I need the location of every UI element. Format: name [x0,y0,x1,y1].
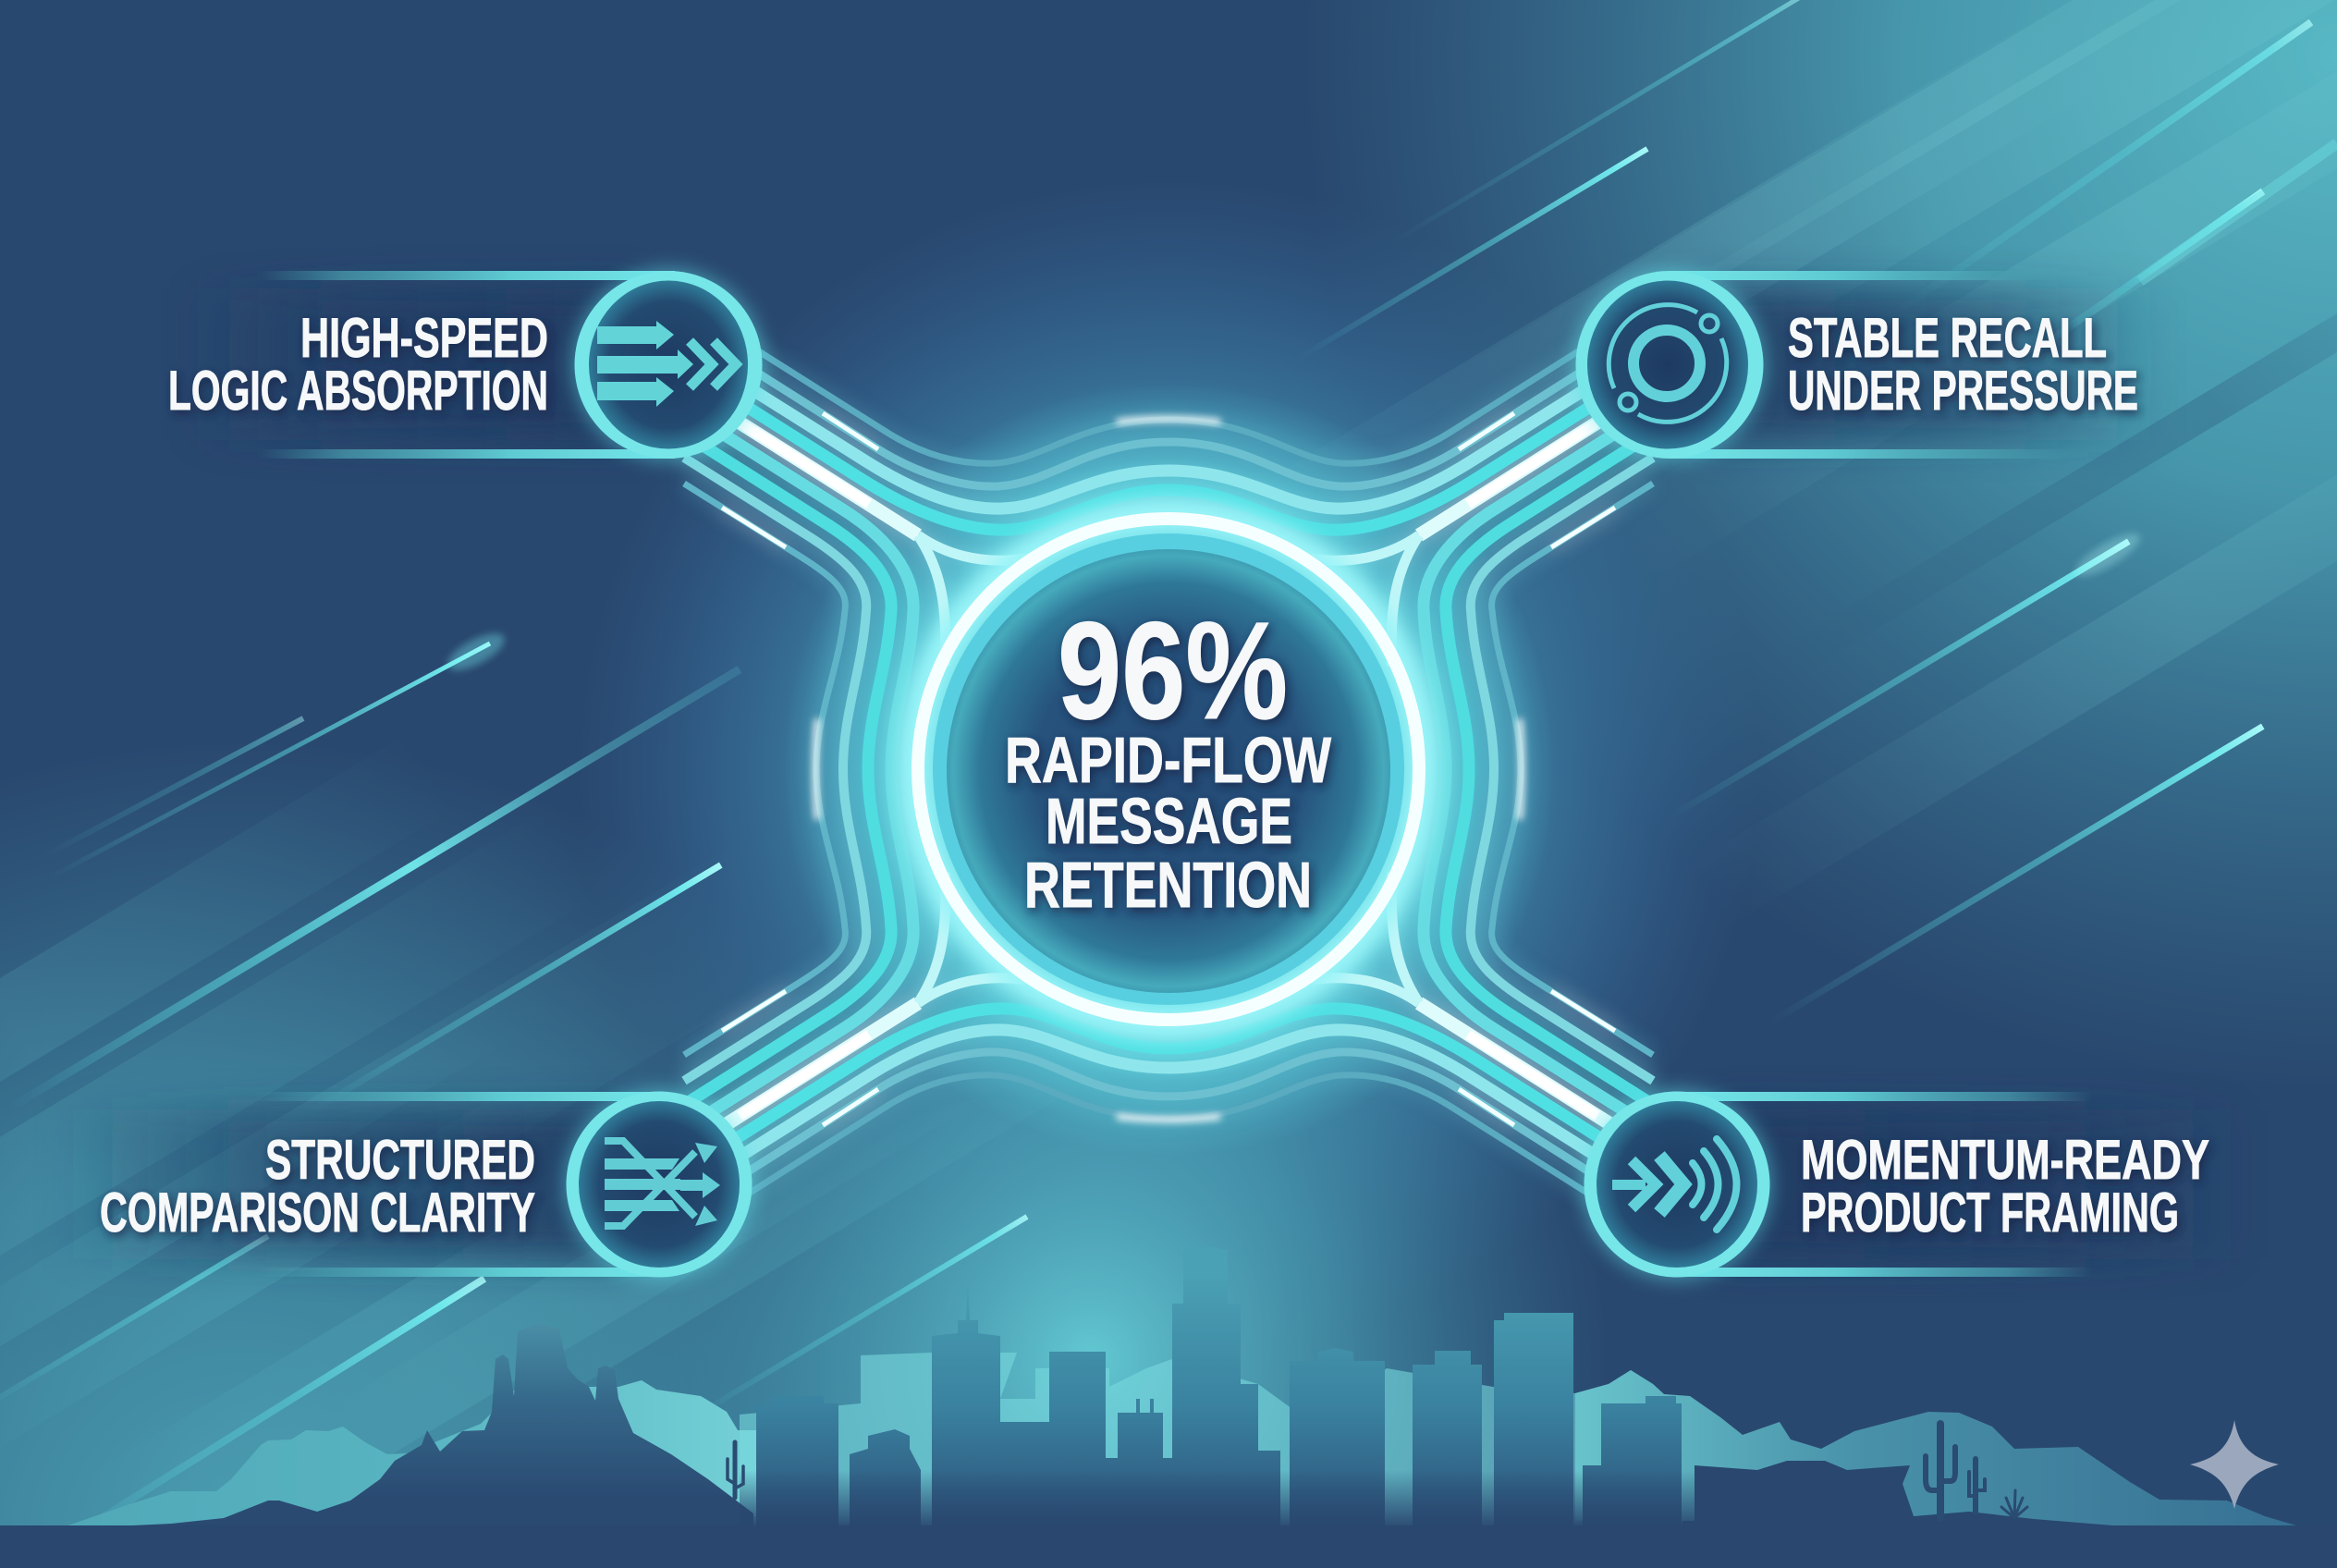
icon: orbit rings [1609,305,1727,422]
icon: crossing flows [605,1141,720,1226]
label text: STABLE RECALL [1788,307,2107,369]
icon: four-point sparkle watermark [2190,1420,2279,1509]
city towers [756,1246,1682,1525]
label text: STRUCTURED [265,1129,535,1191]
label text: COMPARISON CLARITY [100,1182,535,1243]
glowing ring [914,515,1423,1023]
hub text: MESSAGE [1046,785,1292,857]
hub text: 96% [1058,593,1288,748]
central hub: 96% rapid-flow message retention [914,515,1423,1023]
label text [100,1129,535,1243]
icon: arrow into signal waves [1612,1139,1736,1230]
ground fade [740,1470,1756,1530]
saguaro cacti [728,1424,2027,1518]
hub text: RETENTION [1024,849,1312,921]
museum silhouette [1695,1461,2135,1535]
label text: MOMENTUM-READY [1801,1129,2209,1191]
callout: momentum-ready product framing [1582,1089,2246,1280]
hub text [1005,593,1331,921]
label text [168,307,548,422]
skyline with desert mountains [0,1246,2337,1568]
foreground rock silhouette [0,1324,753,1568]
callout: stable recall under pressure [1573,268,2163,460]
apex highlights [815,419,1522,1120]
callout: high-speed logic absorption [168,268,765,460]
hub text: RAPID-FLOW [1005,724,1331,796]
label text [1788,307,2138,422]
label text: HIGH-SPEED [300,307,548,369]
central flow lines [684,304,1653,1234]
inner disk [947,549,1390,993]
left butte background ridge [60,1380,758,1531]
callout: structured comparison clarity [55,1089,754,1280]
label text: UNDER PRESSURE [1788,360,2138,422]
glowing building backdrop [740,1353,1682,1525]
right mountain ridge [1575,1370,2306,1528]
label text: LOGIC ABSORPTION [168,360,548,422]
icon: arrows and chevrons [597,321,736,407]
label text [1801,1129,2209,1243]
label text: PRODUCT FRAMING [1801,1182,2179,1243]
